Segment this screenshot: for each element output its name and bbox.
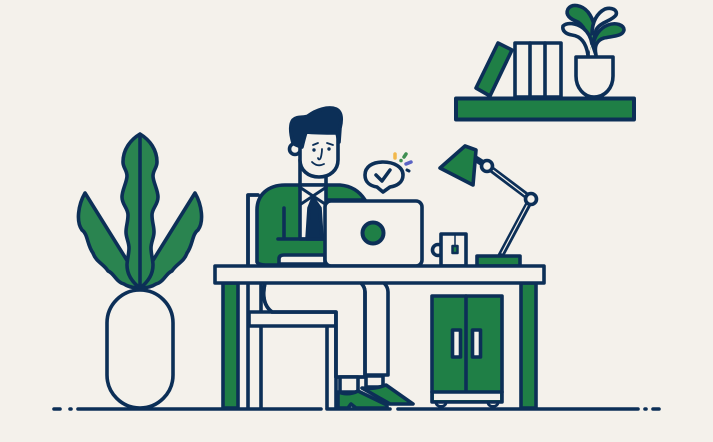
wall shelf with books and plant bbox=[456, 5, 634, 119]
lamp base bbox=[477, 256, 520, 266]
front shoe bbox=[338, 391, 387, 408]
right leaf bbox=[140, 193, 202, 288]
right handle bbox=[472, 330, 480, 357]
left desk leg bbox=[223, 283, 238, 408]
left handle bbox=[452, 330, 460, 357]
cabinet body bbox=[432, 296, 502, 402]
neck bbox=[300, 160, 326, 187]
floor pot bbox=[107, 290, 173, 408]
jacket sleeve lines bbox=[278, 208, 326, 239]
tilted green book bbox=[476, 43, 512, 96]
floor plant bbox=[78, 134, 202, 288]
lamp arms bbox=[476, 159, 531, 257]
lamp shade bbox=[440, 146, 476, 185]
lap strip bbox=[279, 255, 325, 264]
right desk leg bbox=[521, 283, 536, 408]
left leaf bbox=[78, 193, 140, 288]
hair bbox=[291, 108, 341, 147]
face bbox=[300, 132, 338, 177]
speech bubble with check bbox=[365, 162, 403, 192]
shirt and tie bbox=[300, 185, 326, 239]
desk bbox=[215, 266, 544, 408]
upright books bbox=[515, 43, 561, 97]
centre leaf bbox=[122, 134, 158, 288]
back shoe bbox=[362, 385, 413, 404]
chair bbox=[248, 195, 336, 408]
laptop bbox=[325, 201, 422, 266]
ground line bbox=[54, 407, 659, 411]
sparkles bbox=[395, 154, 411, 171]
man bbox=[257, 108, 413, 408]
jacket bbox=[257, 185, 365, 265]
shelf board bbox=[456, 98, 634, 120]
ear bbox=[290, 144, 300, 154]
joints bbox=[482, 160, 492, 172]
mug with tea bag bbox=[432, 234, 466, 266]
facial features bbox=[312, 143, 333, 165]
socks bbox=[340, 376, 383, 392]
cabinet wheels bbox=[436, 402, 498, 406]
desk top bbox=[215, 266, 544, 283]
cabinet bbox=[432, 296, 502, 406]
desk lamp bbox=[440, 146, 536, 266]
potted plant bbox=[563, 5, 624, 97]
legs bbox=[264, 283, 388, 377]
